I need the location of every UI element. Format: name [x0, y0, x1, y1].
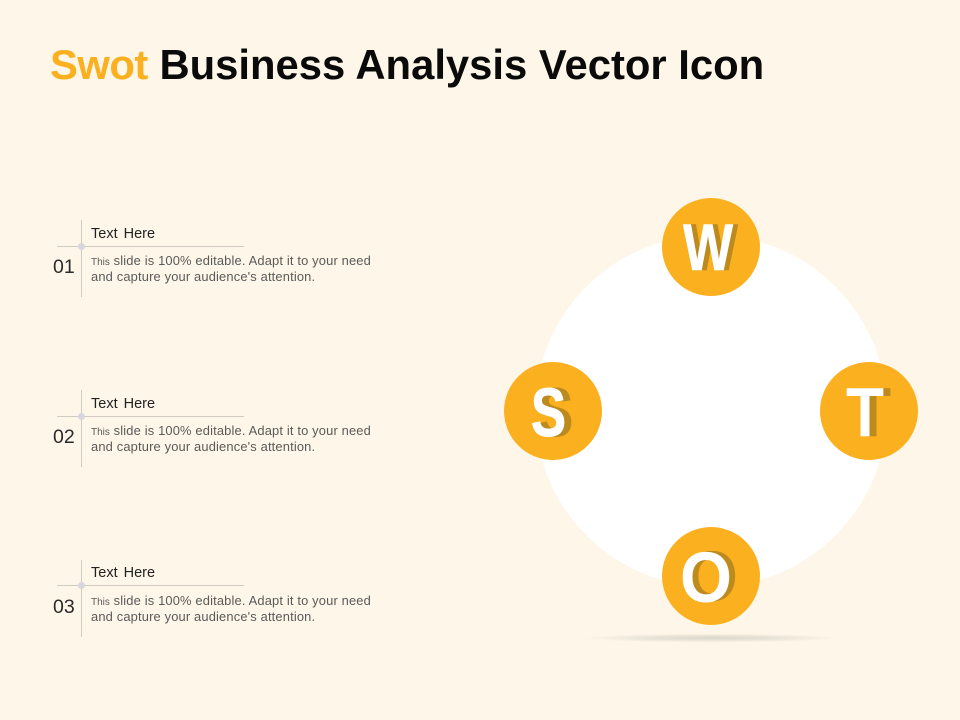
text block 03: This slide is 100% editable. Adapt it to your need	[91, 593, 371, 608]
badge T: T	[846, 373, 884, 451]
number 02: 02	[53, 426, 75, 448]
number 03: 03	[53, 596, 75, 618]
text block 03: and capture your audience's attention.	[91, 609, 315, 624]
badge O: O	[686, 538, 738, 617]
text block 02	[91, 423, 371, 454]
title: Swot Business Analysis Vector Icon	[50, 41, 764, 88]
badge S	[504, 362, 602, 460]
ground shadow	[583, 634, 839, 642]
list item 02	[53, 390, 371, 467]
white circle	[535, 235, 887, 587]
heading 02: Text Here	[91, 396, 155, 412]
heading 01: Text Here	[91, 226, 155, 242]
badge O	[662, 527, 760, 625]
text block 01: This slide is 100% editable. Adapt it to your need	[91, 253, 371, 268]
badge S: S	[531, 374, 566, 451]
text block 01	[91, 253, 371, 284]
list item 03	[53, 560, 371, 637]
text block 02: This slide is 100% editable. Adapt it to your need	[91, 423, 371, 438]
number 01: 01	[53, 256, 75, 278]
badge S: S	[538, 374, 573, 451]
badge W	[662, 198, 760, 296]
badge W: W	[688, 210, 739, 284]
list item 01	[53, 220, 371, 297]
badge T: T	[853, 373, 891, 451]
badge W: W	[683, 210, 734, 284]
heading 03: Text Here	[91, 565, 155, 581]
badge O: O	[680, 539, 732, 618]
text block 02: and capture your audience's attention.	[91, 439, 315, 454]
badge T	[820, 362, 918, 460]
text block 03	[91, 593, 371, 624]
text block 01: and capture your audience's attention.	[91, 269, 315, 284]
